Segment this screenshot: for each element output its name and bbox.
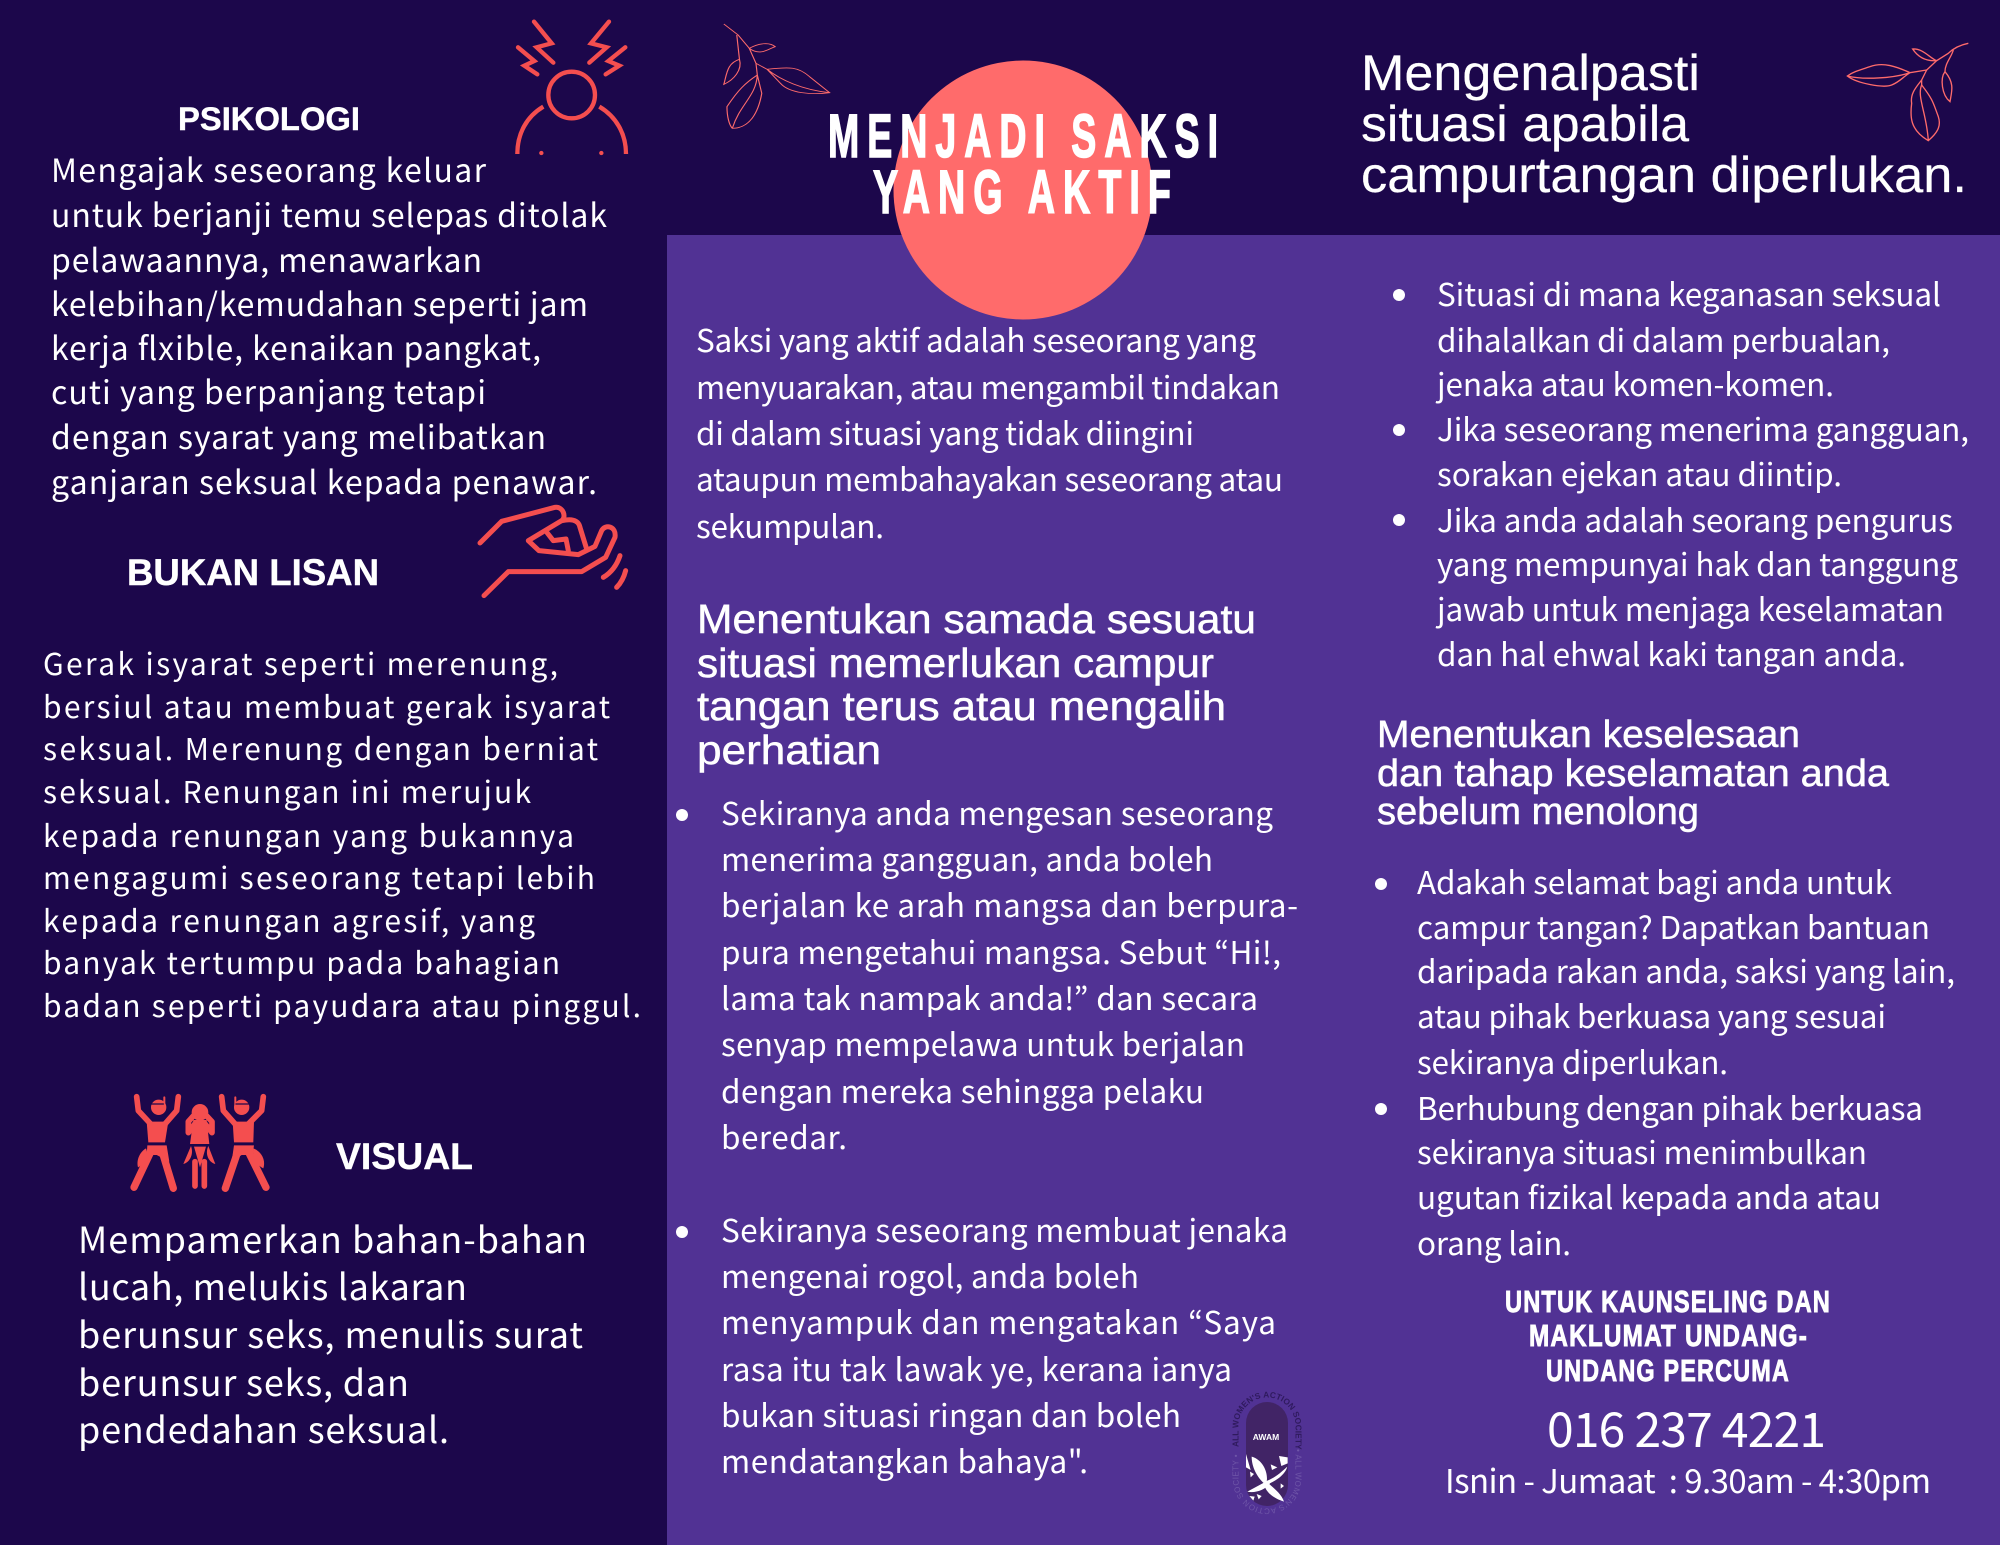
- heading: assess your safety: dan tahap keselamatan anda: [1377, 753, 1890, 795]
- heading: deciding intervention: [697, 596, 1256, 773]
- heading: assess your safety: Menentukan keselesaan: [1377, 714, 1800, 756]
- bullet item: interrupt the joke: mengenai rogol, anda boleh: [721, 1252, 1139, 1298]
- text block: Psikologi description: ganjaran seksual kepada penawar.: [51, 458, 597, 504]
- callout: free counselling and legal info: UNDANG PERCUMA: [1546, 1353, 1790, 1388]
- icon: person with stress lightning: [517, 22, 626, 154]
- text block: Bukan Lisan description: seksual. Merenung dengan berniat: [43, 725, 598, 769]
- text block: Psikologi description: kerja flxible, kenaikan pangkat,: [51, 324, 541, 370]
- heading: assess your safety: [1377, 714, 1890, 833]
- bullet item: interrupt the joke: bukan situasi ringan dan boleh: [721, 1391, 1181, 1437]
- bullet item: interrupt the joke: menyampuk dan mengatakan “Saya: [721, 1298, 1276, 1344]
- heading: deciding intervention: Menentukan samada sesuatu: [697, 596, 1256, 642]
- decorative leaf: top centre: [724, 24, 830, 128]
- icon: hand gesture: [480, 507, 626, 596]
- bullet item: interrupt the joke: Sekiranya seseorang membuat jenaka: [721, 1206, 1288, 1252]
- phone number: 016 237 4221: [1547, 1391, 1826, 1461]
- panel: purple centre and right content area: [667, 235, 2000, 1545]
- text block: intro on active bystander: sekumpulan.: [696, 502, 884, 548]
- bullet list: when to intervene: yang mempunyai hak dan tanggung: [1437, 540, 1958, 586]
- text block: Visual description: berunsur seks, menulis surat: [78, 1307, 583, 1359]
- left figure: [134, 1097, 178, 1188]
- bullet list: safety checks: daripada rakan anda, saksi yang lain,: [1417, 947, 1955, 993]
- bullet item: pretend to know the victim: lama tak nampak anda!” dan secara: [721, 974, 1258, 1020]
- heading: identify situations: Mengenalpasti: [1361, 45, 1700, 101]
- logo: AWAM: AWAM: [1253, 1432, 1279, 1442]
- text block: Visual description: lucah, melukis lakaran: [78, 1259, 467, 1311]
- bullet list: safety checks: Berhubung dengan pihak berkuasa: [1417, 1084, 1923, 1130]
- heading: identify situations: campurtangan diperlukan.: [1361, 147, 1967, 203]
- bullet list: intervention examples: [676, 789, 1298, 1483]
- heading: Bukan Lisan: BUKAN LISAN: [127, 552, 379, 593]
- text block: Psikologi description: kelebihan/kemudahan seperti jam: [51, 280, 588, 326]
- bullet list: safety checks: [1375, 858, 1955, 1265]
- bullet item: interrupt the joke: rasa itu tak lawak ye, kerana ianya: [721, 1345, 1232, 1391]
- text block: Psikologi description: untuk berjanji temu selepas ditolak: [51, 191, 607, 237]
- text block: Psikologi description: Mengajak seseorang keluar: [51, 146, 487, 192]
- bullet list: when to intervene: jawab untuk menjaga keselamatan: [1435, 585, 1944, 631]
- text block: Psikologi description: cuti yang berpanjang tetapi: [51, 368, 486, 414]
- bullet item: interrupt the joke: [676, 1206, 1288, 1483]
- bullet list: when to intervene: jenaka atau komen-komen.: [1435, 360, 1834, 406]
- coral circle behind title: [894, 60, 1152, 320]
- text block: Bukan Lisan description: badan seperti payudara atau pinggul.: [43, 982, 641, 1026]
- opening hours: Isnin - Jumaat : 9.30am - 4:30pm: [1445, 1455, 1931, 1503]
- text block: Psikologi description: dengan syarat yang melibatkan: [51, 413, 546, 459]
- heading: deciding intervention: situasi memerlukan campur: [697, 640, 1214, 686]
- bullet list: safety checks: ugutan fizikal kepada anda atau: [1417, 1173, 1881, 1219]
- title: MENJADI SAKSI: [828, 102, 1226, 170]
- bullet item: pretend to know the victim: menerima gangguan, anda boleh: [721, 835, 1213, 881]
- heading: assess your safety: sebelum menolong: [1377, 791, 1699, 833]
- icon: three figures: [134, 1097, 266, 1188]
- text block: Bukan Lisan description: [43, 640, 641, 1026]
- bullet list: when to intervene: Situasi di mana keganasan seksual: [1437, 270, 1941, 316]
- callout: free counselling and legal info: MAKLUMAT UNDANG-: [1529, 1318, 1808, 1353]
- title: YANG AKTIF: [873, 158, 1179, 226]
- text block: Bukan Lisan description: kepada renungan agresif, yang: [43, 897, 535, 941]
- text block: Bukan Lisan description: seksual. Renungan ini merujuk: [43, 768, 531, 812]
- heading: Psikologi: PSIKOLOGI: [178, 101, 360, 137]
- heading: deciding intervention: tangan terus atau mengalih: [697, 683, 1226, 729]
- text block: Bukan Lisan description: kepada renungan yang bukannya: [43, 812, 574, 856]
- text block: Psikologi description: [51, 146, 607, 504]
- text block: intro on active bystander: menyuarakan, atau mengambil tindakan: [696, 363, 1280, 409]
- heading: identify situations: situasi apabila: [1361, 96, 1689, 152]
- bullet item: pretend to know the victim: pura mengetahui mangsa. Sebut “Hi!,: [721, 928, 1281, 974]
- bullet list: safety checks: campur tangan? Dapatkan bantuan: [1417, 903, 1930, 949]
- text block: Bukan Lisan description: banyak tertumpu pada bahagian: [43, 939, 560, 983]
- bullet list: safety checks: sekiranya situasi menimbulkan: [1417, 1128, 1867, 1174]
- bullet list: safety checks: orang lain.: [1417, 1219, 1571, 1265]
- bullet list: safety checks: atau pihak berkuasa yang sesuai: [1417, 992, 1886, 1038]
- bullet list: when to intervene: [1393, 270, 1969, 676]
- bullet item: pretend to know the victim: berjalan ke arah mangsa dan berpura-: [721, 881, 1298, 927]
- right figure: [222, 1097, 266, 1188]
- bullet item: interrupt the joke: mendatangkan bahaya".: [721, 1437, 1088, 1483]
- text block: intro on active bystander: di dalam situasi yang tidak diingini: [696, 409, 1194, 455]
- text block: Visual description: Mempamerkan bahan-bahan: [78, 1212, 587, 1264]
- callout: free counselling and legal info: UNTUK KAUNSELING DAN: [1505, 1284, 1831, 1319]
- bullet list: when to intervene: dihalalkan di dalam perbualan,: [1437, 316, 1890, 362]
- bullet list: when to intervene: Jika anda adalah seorang pengurus: [1437, 496, 1953, 542]
- bullet list: safety checks: sekiranya diperlukan.: [1417, 1038, 1728, 1084]
- text block: intro on active bystander: ataupun membahayakan seseorang atau: [696, 455, 1283, 501]
- bullet item: pretend to know the victim: senyap mempelawa untuk berjalan: [721, 1020, 1245, 1066]
- text block: Visual description: berunsur seks, dan: [78, 1355, 409, 1407]
- text block: Visual description: [78, 1212, 587, 1454]
- text block: Psikologi description: pelawaannya, menawarkan: [51, 236, 482, 282]
- bullet list: safety checks: Adakah selamat bagi anda untuk: [1417, 858, 1893, 904]
- title: [828, 102, 1226, 226]
- text block: intro on active bystander: [696, 316, 1283, 548]
- callout: free counselling and legal info: [1505, 1284, 1831, 1388]
- text block: Bukan Lisan description: mengagumi seseorang tetapi lebih: [43, 854, 595, 898]
- heading: deciding intervention: perhatian: [697, 727, 881, 773]
- text block: Bukan Lisan description: bersiul atau membuat gerak isyarat: [43, 683, 610, 727]
- text block: intro on active bystander: Saksi yang aktif adalah seseorang yang: [696, 316, 1256, 362]
- heading: Visual: VISUAL: [336, 1136, 473, 1177]
- logo: AWAM: ALL WOMEN'S ACTION SOCIETY: [1232, 1392, 1302, 1450]
- logo: AWAM: • ALL WOMEN'S ACTION SOCIETY •: [1232, 1450, 1302, 1514]
- text block: Visual description: pendedahan seksual.: [78, 1402, 449, 1454]
- bullet list: when to intervene: dan hal ehwal kaki tangan anda.: [1437, 630, 1906, 676]
- bullet item: pretend to know the victim: dengan mereka sehingga pelaku: [721, 1067, 1204, 1113]
- logo: AWAM: [1232, 1392, 1302, 1514]
- bullet list: when to intervene: Jika seseorang menerima gangguan,: [1437, 405, 1969, 451]
- centre figure: [183, 1104, 215, 1186]
- heading: identify situations: [1361, 45, 1967, 203]
- text block: Bukan Lisan description: Gerak isyarat seperti merenung,: [43, 640, 558, 684]
- bullet item: pretend to know the victim: beredar.: [721, 1113, 847, 1159]
- bullet item: pretend to know the victim: Sekiranya anda mengesan seseorang: [721, 789, 1273, 835]
- decorative leaf: top right: [1847, 43, 1968, 141]
- logo star: [1246, 1454, 1288, 1502]
- bullet item: pretend to know the victim: [676, 789, 1298, 1159]
- bullet list: when to intervene: sorakan ejekan atau diintip.: [1437, 450, 1842, 496]
